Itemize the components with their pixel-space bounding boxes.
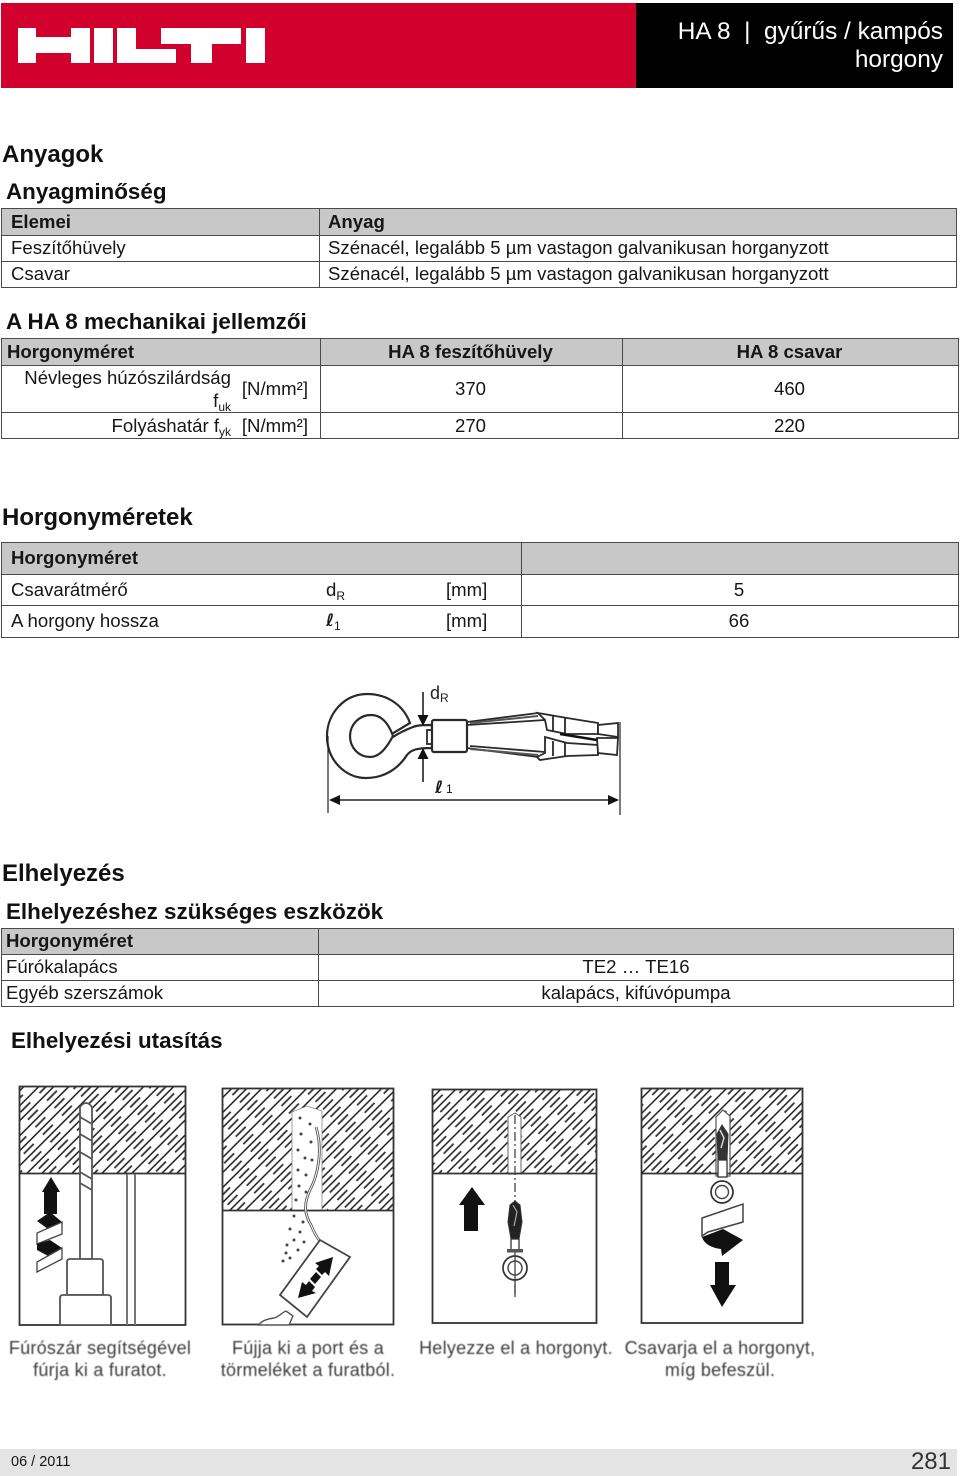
table: mechanical properties: 220 <box>774 415 805 436</box>
table: mechanical properties: 460 <box>774 378 805 399</box>
table: material quality: Elemei <box>11 211 71 232</box>
l1 dimension line <box>328 722 620 815</box>
anchor <box>503 1201 527 1297</box>
Hilti logo <box>18 28 265 63</box>
table: mechanical properties: HA 8 csavar <box>737 341 842 362</box>
caption: step 1: Fúrószár segítségével <box>9 1338 191 1358</box>
table: required tools <box>1 928 954 1007</box>
table: anchor dimensions: [mm] <box>446 579 487 600</box>
table: required tools: Fúrókalapács <box>6 956 118 977</box>
table: anchor dimensions: dR <box>326 579 345 603</box>
twist ribbon <box>37 1212 62 1272</box>
arrow up <box>459 1187 485 1231</box>
panel: step 4 tighten anchor <box>642 1088 802 1323</box>
installation step illustrations <box>18 1086 804 1326</box>
table: mechanical properties: Horgonyméret <box>7 341 134 362</box>
dust particles <box>282 1116 314 1262</box>
table: anchor dimensions: Csavarátmérő <box>11 579 128 600</box>
caption: step 1: fúrja ki a furatot. <box>33 1360 167 1380</box>
turn arrow <box>702 1229 743 1256</box>
table: material quality: Szénacél, legalább 5 µm vastagon galvanikusan horganyzott <box>328 263 829 284</box>
product title: horgony <box>855 46 943 73</box>
heading: tools: Elhelyezéshez szükséges eszközök <box>6 899 383 924</box>
page number: 281 <box>911 1448 951 1475</box>
heading: mechanical properties: A HA 8 mechanikai jellemzői <box>6 309 307 334</box>
heading: Elhelyezés: Elhelyezés <box>2 860 125 887</box>
caption: step 2: Fújja ki a port és a <box>232 1338 384 1358</box>
blow pump <box>280 1240 350 1317</box>
footer band <box>0 1449 957 1476</box>
hook eye <box>327 694 432 778</box>
date: 06 / 2011 <box>11 1454 70 1470</box>
heading: Anyagok: Anyagok <box>2 141 103 168</box>
caption: step 4: míg befeszül. <box>665 1360 775 1380</box>
dR arrows <box>418 692 428 782</box>
anchor sleeve and expanding legs <box>427 713 618 760</box>
table: mechanical properties: Névleges húzószilárdság <box>24 367 231 388</box>
table: material quality: Feszítőhüvely <box>11 237 126 258</box>
table: mechanical properties: HA 8 feszítőhüvely <box>388 341 553 362</box>
turn ribbon <box>702 1204 743 1236</box>
installed anchor <box>711 1125 733 1203</box>
table: anchor dimensions: Horgonyméret <box>11 547 138 568</box>
table: required tools: TE2 … TE16 <box>582 956 690 977</box>
table: material quality: Szénacél, legalább 5 µm vastagon galvanikusan horganyzott <box>328 237 829 258</box>
product title <box>678 18 943 73</box>
table: material quality: Anyag <box>328 211 385 232</box>
caption: step 1 <box>9 1338 191 1381</box>
header band <box>1 3 953 88</box>
table: anchor dimensions <box>1 542 959 638</box>
centerline <box>514 1115 516 1297</box>
product title: HA 8 | gyűrűs / kampós <box>678 18 943 45</box>
caption: step 4: Csavarja el a horgonyt, <box>625 1338 815 1358</box>
label l1: ℓ1 <box>434 778 453 798</box>
table: mechanical properties: [N/mm²] <box>242 378 308 399</box>
table: anchor dimensions: 5 <box>734 579 744 600</box>
label dR: d <box>430 683 440 703</box>
table: mechanical properties: [N/mm²] <box>242 415 308 436</box>
table: anchor dimensions: [mm] <box>446 610 487 631</box>
table: mechanical properties: 270 <box>455 415 486 436</box>
table: material quality: Csavar <box>11 263 70 284</box>
caption: step 3: Helyezze el a horgonyt. <box>419 1338 613 1358</box>
air tube <box>306 1127 319 1240</box>
heading: Horgonyméretek: Horgonyméretek <box>2 504 193 531</box>
panel: step 2 blowing <box>222 1088 394 1325</box>
table: anchor dimensions: 66 <box>729 610 749 631</box>
table: anchor dimensions: ℓ1 <box>326 611 341 633</box>
caption: step 4 <box>624 1338 815 1381</box>
arrow down <box>710 1262 736 1307</box>
red logo panel <box>1 3 636 88</box>
label dR: R <box>440 691 449 705</box>
heading: Anyagminőség: Anyagminőség <box>6 179 166 204</box>
caption: step 2: törmeléket a furatból. <box>221 1360 395 1380</box>
pump nozzle <box>259 1311 293 1325</box>
panel: step 3 insert anchor <box>432 1090 596 1323</box>
arrow up <box>42 1177 60 1214</box>
diagram: anchor with dimensions <box>326 683 621 815</box>
pump arrows <box>298 1257 333 1298</box>
table: mechanical properties: fuk <box>213 390 231 414</box>
table: mechanical properties <box>1 338 959 439</box>
table: required tools: Egyéb szerszámok <box>6 982 163 1003</box>
table: anchor dimensions: A horgony hossza <box>11 610 159 631</box>
table: mechanical properties: Folyáshatár fyk <box>112 415 231 439</box>
table: required tools: Horgonyméret <box>6 930 133 951</box>
caption: step 2 <box>220 1338 395 1380</box>
panel: step 1 drilling <box>20 1086 186 1325</box>
table: material quality <box>1 208 957 288</box>
black title panel <box>636 3 953 88</box>
table: required tools: kalapács, kifúvópumpa <box>541 982 731 1003</box>
heading: installation instructions: Elhelyezési utasítás <box>11 1028 223 1053</box>
drill bit <box>60 1103 111 1325</box>
table: mechanical properties: 370 <box>455 378 486 399</box>
vertical double line <box>127 1174 135 1325</box>
